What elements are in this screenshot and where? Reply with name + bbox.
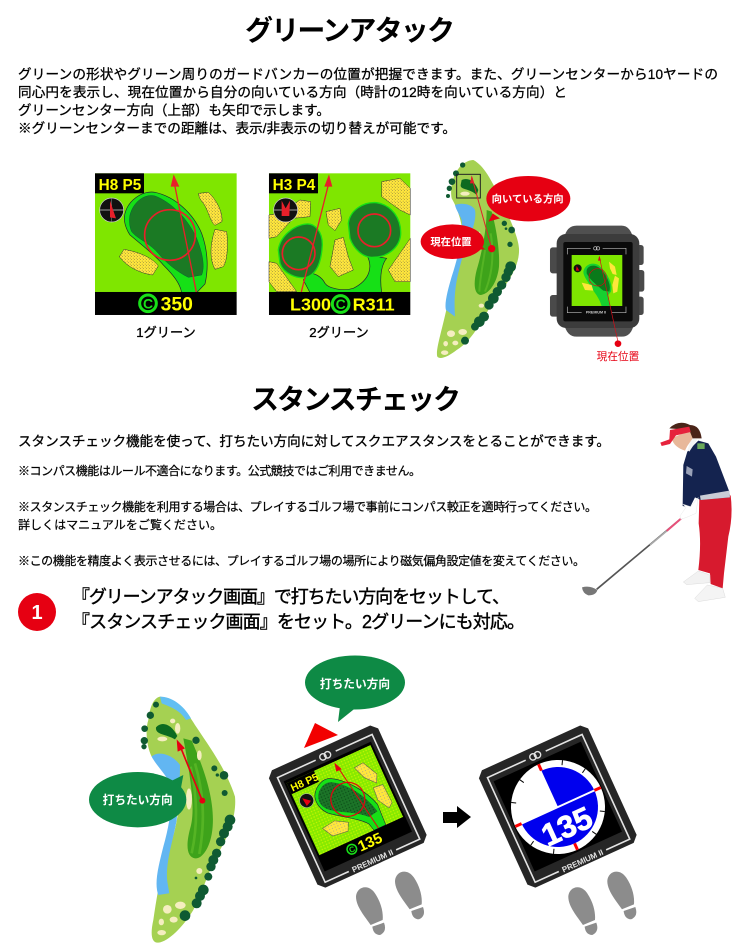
golf club [582,517,683,595]
text block: notes: ※スタンスチェック機能を利用する場合は、プレイするゴルフ場で事前にコンパス較正を適時行ってください。 [18,499,597,514]
legs [698,495,732,588]
compass dial: 135 [536,800,598,853]
screen: 1 green [95,173,237,315]
label: 1 green: 1グリーン [136,325,196,340]
screen: 2 green: L300 [290,294,331,314]
label: 2 green: 2グリーン [309,325,369,340]
text block: stance check description: スタンスチェック機能を使って、打ちたい方向に対してスクエアスタンスをとることができます。 [18,433,610,449]
screen: 1 green: 350 [161,294,193,315]
title: green attack: グリーンアタック [245,14,455,46]
callout: target direction: 打ちたい方向 [103,793,173,807]
text block: step instruction: 『スタンスチェック画面』をセット。2グリーンにも対応。 [72,612,525,632]
text block: notes: 詳しくはマニュアルをご覧ください。 [18,517,222,532]
screen: 2 green [269,173,410,315]
collar and neck [687,438,697,452]
text block: notes: ※コンパス機能はルール不適合になります。公式競技ではご利用できません。 [18,463,421,478]
device: green attack screen rotated: 135 [355,830,385,855]
illustration: golfer addressing the ball [582,423,732,602]
callout: facing direction: 向いている方向 [492,192,564,205]
text block: step instruction: 『グリーンアタック画面』で打ちたい方向をセットして、 [72,587,510,607]
device: green attack screen rotated: H8 P5 [289,771,321,794]
head [672,430,693,451]
callout: target direction [89,772,186,827]
text block: green attack description: グリーンの形状やグリーン周りのガードバンカーの位置が把握できます。また、グリーンセンターから10ヤードの [18,67,718,82]
illustration: golf course hole with direction callouts [421,160,570,358]
text block: green attack description: ※グリーンセンターまでの距離は、表示/非表示の切り替えが可能です。 [18,121,456,136]
callout: facing direction [486,176,570,222]
text block: green attack description: 同心円を表示し、現在位置から自分の向いている方向（時計の12時を向いている方向）と [18,85,567,100]
text block: step instruction [72,587,525,632]
device: green attack screen rotated [266,723,429,890]
text block: green attack description: グリーンセンター方向（上部）も矢印で示します。 [18,103,330,118]
visor [660,427,691,446]
panel: 1 green and 2 green screens [95,173,410,315]
screen: 1 green: C [143,295,153,311]
callout: target direction above device: 打ちたい方向 [320,677,390,691]
icon: black arrow [443,806,471,828]
title: stance check: スタンスチェック [251,384,461,415]
text block: notes [18,463,597,568]
callout: current position: 現在位置 [430,235,472,248]
device: green attack screen rotated: C [348,844,357,855]
illustration: course with target direction [89,697,235,943]
callout: current position [421,224,485,259]
hair with ponytail [669,423,702,438]
shoes [683,571,725,602]
illustration: golf watch: PREMIUM II [586,310,606,314]
sweater [683,441,730,507]
device: compass stance check screen rotated [476,723,639,890]
screen: 1 green: H8 P5 [99,177,142,194]
screen: 2 green: H3 P4 [273,177,316,194]
text block: green attack description [18,67,718,136]
callout: target direction above device [305,656,405,722]
compass dial [496,745,620,869]
device: green attack screen rotated: PREMIUM II [351,848,395,874]
step number badge: 1 [31,602,43,624]
screen: 2 green: R311 [353,294,395,314]
cuff, glove and hand [680,497,698,519]
step number badge [18,593,56,631]
icon: footprints left [356,872,424,935]
illustration: golf watch: 現在位置 [597,350,640,363]
icon: red direction triangle [304,723,338,748]
screen: 2 green: C [336,296,346,312]
illustration: golf watch [550,226,644,363]
device: compass stance check screen rotated: PREMIUM II [561,848,605,874]
text block: notes: ※この機能を精度よく表示させるには、プレイするゴルフ場の場所により磁気偏角設定値を変えてください。 [18,553,585,568]
icon: footprints right [568,872,636,935]
